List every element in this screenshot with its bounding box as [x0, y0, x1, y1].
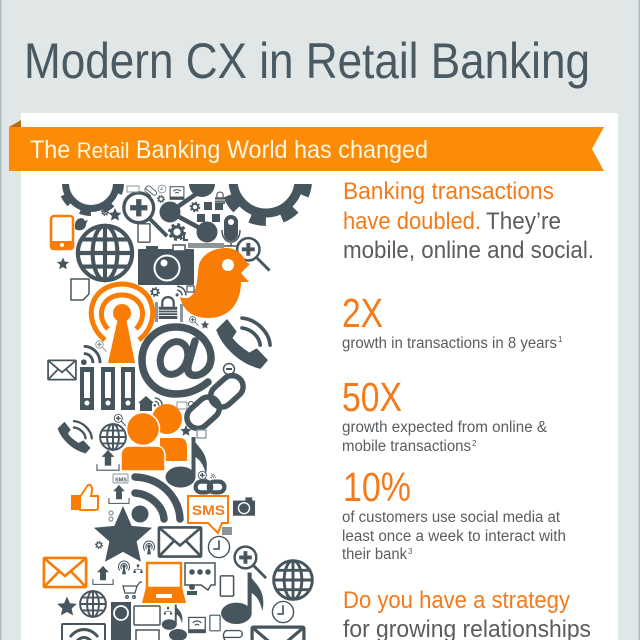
closing question: Do you have a strategy: [343, 587, 570, 614]
right column text: [342, 178, 594, 640]
icon: orange envelope: [44, 558, 86, 587]
stat: 10%: their bank: [342, 546, 407, 563]
icon: at sign: [142, 327, 211, 394]
stat: 10%: [342, 464, 566, 563]
icon: small magnifier and chain: [196, 471, 224, 492]
small icons top row: [75, 185, 225, 248]
icon: big star: [94, 506, 152, 562]
icon: small SMS bubble: SMS: [115, 478, 127, 484]
icon: small note and device cluster: [162, 604, 220, 640]
icon: cart: [123, 582, 142, 598]
icon: small SMS bubble: [113, 474, 128, 484]
icon: star small: [57, 258, 69, 269]
stat: 50X: growth expected from online &: [342, 419, 548, 436]
stat: 50X: 50X: [342, 374, 402, 420]
icon: orange broadcast beacon: [91, 284, 153, 363]
heading: banking transactions: [343, 178, 594, 264]
icon: music note lower: [221, 572, 263, 624]
icon: gears at top: [60, 184, 312, 226]
icon: orange thumbs up: [71, 485, 98, 510]
icon: small star and box: [180, 425, 206, 438]
icon: upload: [97, 450, 119, 470]
icon: small camera: [233, 497, 255, 516]
stat: 2X: [342, 290, 563, 352]
icon: envelope left: [48, 360, 76, 380]
heading: banking transactions: They’re: [486, 208, 561, 235]
stat: 2X: growth in transactions in 8 years: [342, 335, 557, 352]
icon: tablet outline: [134, 606, 160, 625]
icon: chain link large: [182, 371, 248, 433]
icon: small magnifier left: [114, 414, 126, 426]
icon: telephone left: [58, 421, 92, 453]
icon: rectangle bottom: [136, 630, 159, 640]
stat: 50X: 2: [472, 439, 477, 448]
banner heading: The Retail Banking World has changed: [30, 136, 428, 164]
icon: paperclip: [223, 631, 242, 640]
icon: clock right: [272, 601, 294, 623]
icon: small magnifier: [96, 341, 107, 352]
icon: tiny gear and beacon: [96, 527, 232, 554]
icon: orange SMS bubble: SMS: [192, 502, 225, 518]
stat: 50X: [342, 374, 548, 455]
icon: magnifier lower: [235, 547, 266, 578]
icon: minus magnifier: [224, 364, 241, 379]
stat: 10%: 10%: [343, 464, 411, 510]
icon: music note upper: [166, 437, 207, 488]
small icons around lock: [151, 286, 209, 329]
heading: banking transactions: have doubled.: [343, 208, 481, 235]
icon: clock: [208, 536, 230, 558]
icon: orange phone: [50, 216, 74, 250]
icon: magnifier right: [237, 238, 270, 271]
icon: star and globe bottom left: [57, 591, 106, 617]
icon: upload middle: [109, 485, 129, 503]
icon: microphone: [222, 215, 240, 246]
icon: orange SMS bubble: [188, 496, 228, 533]
stat: 2X: 2X: [342, 290, 383, 336]
stat: 50X: mobile transactions: [342, 438, 471, 455]
icon: phone outline: [220, 576, 234, 596]
icon: camera large: [138, 245, 194, 285]
stat: 10%: of customers use social media at: [342, 509, 561, 526]
icon: small beacon and network: [119, 561, 143, 574]
stat: 10%: least once a week to interact with: [342, 528, 566, 545]
icon: wifi arcs: [81, 346, 100, 365]
heading: banking transactions: mobile, online and social.: [343, 237, 594, 264]
closing question: [343, 587, 591, 640]
icon: envelope centre: [159, 527, 201, 557]
icon: globe large: [78, 226, 132, 280]
icon: tiny people: [187, 584, 197, 595]
icon: globe right: [274, 561, 312, 599]
icon: wifi device bottom: [62, 624, 105, 640]
icon: speech bubble: [185, 563, 215, 590]
icon: upload lower: [93, 566, 113, 584]
icon: envelope bottom right: [252, 627, 304, 640]
icon: orange laptop: [142, 563, 186, 603]
stat: 10%: 3: [408, 547, 413, 556]
icon collage: [44, 139, 312, 640]
icon: orange people: [121, 404, 187, 471]
icon: binders: [80, 367, 135, 410]
stat: 2X: 1: [558, 335, 563, 344]
icon: orange bird: [180, 248, 250, 318]
small icons under at sign: [138, 396, 194, 411]
icon: RSS: [132, 477, 180, 522]
icon: document: [71, 279, 89, 300]
icon: telephone large: [217, 318, 270, 368]
icon: share nodes: [160, 190, 217, 242]
white content panel: [21, 113, 618, 640]
icon: speaker: [111, 602, 131, 640]
heading: banking transactions: Banking transactions: [343, 178, 554, 205]
banner ribbon: [9, 120, 604, 171]
icon: small chain dots: [109, 511, 113, 521]
icon: globe small: [100, 424, 126, 450]
icon: magnifier top: [124, 193, 167, 236]
